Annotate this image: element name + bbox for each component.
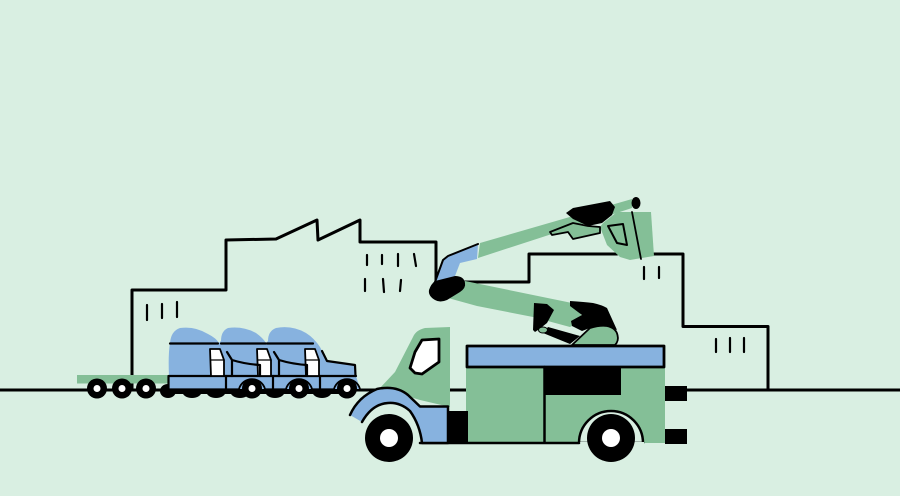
building windows [147,254,744,352]
ground line [0,388,900,392]
truck cabs body [169,327,360,389]
dark compartment [544,367,621,395]
black clamp [566,201,615,226]
boom base joint [570,301,617,331]
utility body [466,367,665,443]
boom elbow black [429,276,465,302]
connector block [448,411,468,443]
boom elbow blue [435,244,478,282]
boom tip knob [632,197,640,209]
truck wheels [239,379,360,389]
wheel well rear [579,411,643,443]
wheels [365,414,413,462]
cab window [410,339,439,374]
cab [380,327,450,407]
fender [350,388,448,443]
toolbox lid [467,346,664,367]
turret mound [572,326,618,345]
flatbed trailer [77,375,169,398]
convoy of blue trucks [160,327,360,398]
bucket arm bracket [550,223,600,239]
bucket truck [350,327,687,462]
rear lights [665,386,687,401]
factory buildings outline [132,220,768,390]
boom arm upper [429,199,632,302]
bucket [550,197,654,260]
boom arm lower [448,281,618,345]
truck doors [210,349,319,376]
lower piston [543,327,580,344]
